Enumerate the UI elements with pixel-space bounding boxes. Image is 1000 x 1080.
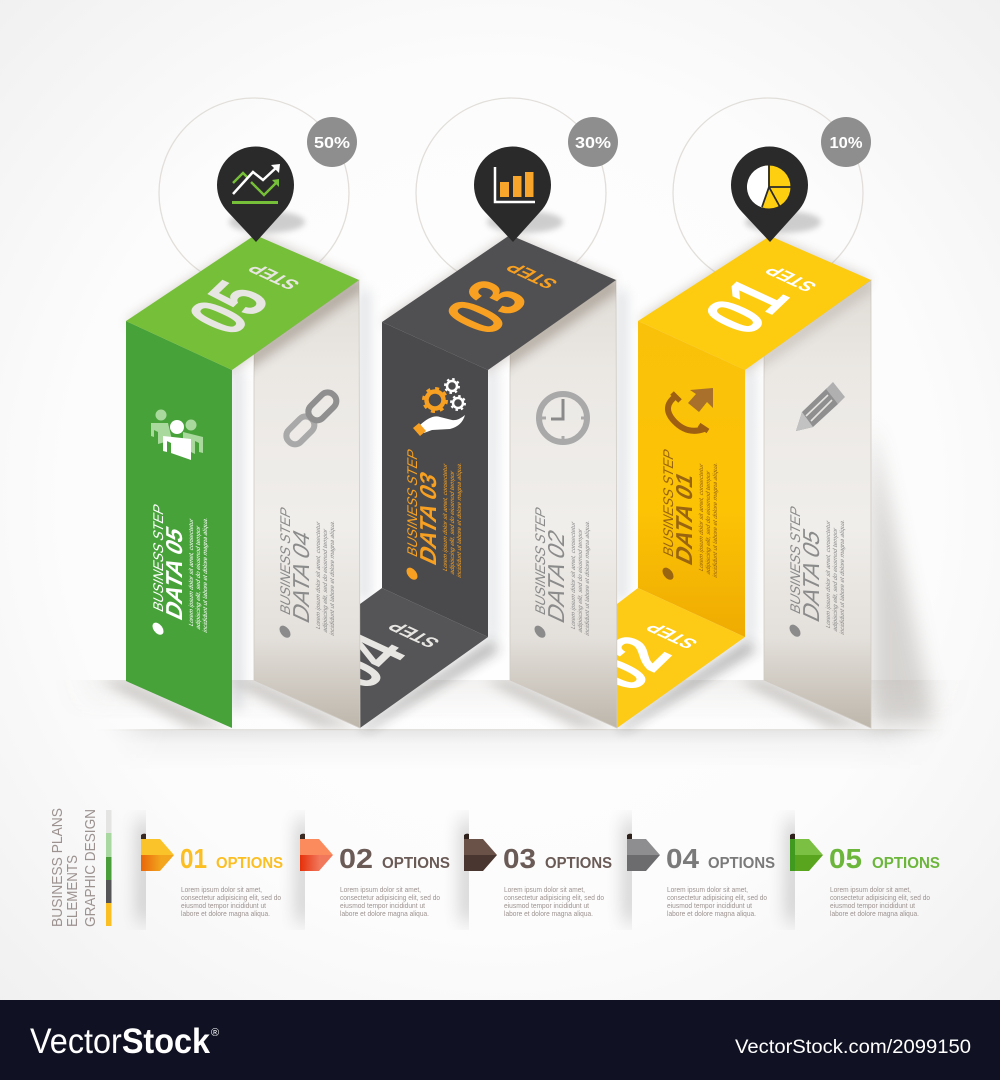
- colour strip: [106, 810, 112, 926]
- panel: green front data 05: [126, 321, 232, 728]
- text: data 03: [406, 438, 463, 603]
- option 04: 04: [666, 843, 699, 874]
- text: data 05 green: adipiscing elit, sed do eiusmod tempor: [195, 525, 202, 631]
- option 02: labore et dolore magna aliqua.: [340, 909, 429, 918]
- text: data 04: Lorem ipsum dolor sit amet, consectetur: [315, 521, 322, 631]
- icon: clock: [539, 394, 587, 442]
- option 01: Lorem ipsum dolor sit amet,: [181, 885, 262, 894]
- option 03: 03: [503, 843, 536, 874]
- text: data 01: [662, 438, 719, 603]
- panel: paper data 04: [254, 279, 360, 728]
- text: data 04: [279, 496, 336, 661]
- option 05: consectetur adipisicing elit, sed do: [830, 893, 930, 902]
- text: data 05 paper: [789, 495, 846, 660]
- label: step 04: STEP: [383, 618, 445, 651]
- text: data 01: DATA 01: [672, 468, 698, 569]
- ring: 10 percent: [673, 98, 863, 288]
- text: data 03: DATA 03: [416, 468, 442, 569]
- option 01: 01: [180, 843, 207, 874]
- badge: 50 percent: 50%: [314, 135, 350, 152]
- arrow tab 03: [464, 834, 497, 871]
- vertical heading: [49, 808, 99, 927]
- icon: pencil: [796, 382, 845, 431]
- option 04: [627, 820, 775, 922]
- option 01: [141, 820, 283, 922]
- label: step 02: STEP: [641, 619, 703, 652]
- option 04: consectetur adipisicing elit, sed do: [667, 893, 767, 902]
- ring: 30 percent: [416, 98, 606, 288]
- footer bar: [0, 1000, 1000, 1080]
- icon: chain link: [283, 389, 340, 448]
- footer logo: VectorStock: [30, 1022, 210, 1061]
- icon: people: [151, 410, 203, 460]
- option 03: [464, 820, 612, 922]
- option 02: 02: [339, 843, 373, 874]
- number 01: 01: [686, 268, 807, 345]
- badge: 10 percent: [821, 117, 871, 167]
- ring: 50 percent: [159, 98, 349, 288]
- text: data 05 green: BUSINESS STEP: [152, 502, 167, 615]
- option 02: [300, 820, 450, 922]
- label: step 03: STEP: [501, 259, 563, 292]
- badge: 30 percent: [568, 117, 618, 167]
- option 02: Lorem ipsum dolor sit amet,: [340, 885, 421, 894]
- vertical heading: ELEMENTS: [64, 855, 81, 927]
- number 04: 04: [305, 623, 424, 699]
- option 01: consectetur adipisicing elit, sed do: [181, 893, 281, 902]
- number 05: 05: [170, 271, 288, 345]
- face: step 01: [638, 236, 871, 370]
- text: data 05 paper: DATA 05: [799, 525, 825, 626]
- option 04: OPTIONS: [708, 855, 775, 872]
- arrow tab 02: [300, 834, 333, 871]
- floor shelf: [90, 235, 935, 770]
- option 05: [790, 820, 940, 922]
- arrow tab 04: [627, 834, 660, 871]
- option 05: 05: [829, 843, 862, 874]
- option 02: eiusmod tempor incididunt ut: [340, 901, 426, 910]
- face: step 03: [382, 235, 616, 370]
- icon: phone and arrow: [668, 388, 713, 431]
- badge: 30 percent: 30%: [575, 135, 611, 152]
- text: data 05 green: DATA 05: [162, 523, 188, 624]
- text: data 01: incididunt ut labore et dolore magna aliqua.: [712, 461, 719, 579]
- text: data 03: Lorem ipsum dolor sit amet, consectetur: [442, 463, 449, 573]
- option 04: labore et dolore magna aliqua.: [667, 909, 756, 918]
- option 05: OPTIONS: [872, 855, 940, 872]
- text: data 03: adipiscing elit, sed do eiusmod tempor: [449, 470, 456, 576]
- text: data 03: incididunt ut labore et dolore magna aliqua.: [456, 461, 463, 579]
- option 03: eiusmod tempor incididunt ut: [504, 901, 590, 910]
- option 02: consectetur adipisicing elit, sed do: [340, 893, 440, 902]
- text: data 04: adipiscing elit, sed do eiusmod tempor: [322, 528, 329, 634]
- option 05: labore et dolore magna aliqua.: [830, 909, 919, 918]
- text: data 05 green: [152, 493, 209, 658]
- text: data 05 green: incididunt ut labore et dolore magna aliqua.: [202, 516, 209, 634]
- pin: pie chart: [731, 147, 821, 242]
- text: data 04: incididunt ut labore et dolore magna aliqua.: [329, 519, 336, 637]
- text: data 03: BUSINESS STEP: [406, 447, 421, 560]
- vertical heading: BUSINESS PLANS: [49, 808, 66, 927]
- option 04: eiusmod tempor incididunt ut: [667, 901, 753, 910]
- option 03: Lorem ipsum dolor sit amet,: [504, 885, 585, 894]
- face: step 02: [617, 588, 745, 728]
- option 03: labore et dolore magna aliqua.: [504, 909, 593, 918]
- option 01: OPTIONS: [216, 855, 283, 872]
- option 01: eiusmod tempor incididunt ut: [181, 901, 267, 910]
- text: data 05 paper: incididunt ut labore et dolore magna aliqua.: [839, 518, 846, 636]
- number 03: 03: [427, 269, 546, 345]
- text: data 04: DATA 04: [289, 526, 315, 627]
- text: data 01: adipiscing elit, sed do eiusmod tempor: [705, 470, 712, 576]
- number 02: 02: [570, 625, 689, 701]
- text: data 05 green: Lorem ipsum dolor sit amet, consectetur: [188, 518, 195, 628]
- option 01: labore et dolore magna aliqua.: [181, 909, 270, 918]
- text: data 05 paper: adipiscing elit, sed do eiusmod tempor: [832, 527, 839, 633]
- option 05: eiusmod tempor incididunt ut: [830, 901, 916, 910]
- registered mark: ®: [211, 1027, 219, 1039]
- label: step 05: STEP: [243, 260, 305, 293]
- badge: 50 percent: [307, 117, 357, 167]
- text: data 02: incididunt ut labore et dolore magna aliqua.: [584, 519, 591, 637]
- text: data 04: BUSINESS STEP: [279, 505, 294, 618]
- panel: dark front data 03: [382, 322, 488, 637]
- text: data 02: BUSINESS STEP: [534, 505, 549, 618]
- pin: growth chart: [217, 147, 305, 242]
- icon: gears and hand: [413, 379, 465, 436]
- text: data 01: BUSINESS STEP: [662, 447, 677, 560]
- text: data 01: Lorem ipsum dolor sit amet, consectetur: [698, 463, 705, 573]
- text: data 05 paper: Lorem ipsum dolor sit amet, consectetur: [825, 520, 832, 630]
- panel: yellow front data 01: [638, 321, 745, 637]
- option 03: consectetur adipisicing elit, sed do: [504, 893, 604, 902]
- face: step 04: [360, 588, 488, 728]
- option 04: Lorem ipsum dolor sit amet,: [667, 885, 748, 894]
- text: data 02: Lorem ipsum dolor sit amet, consectetur: [570, 521, 577, 631]
- pin: bar chart: [474, 147, 563, 242]
- vertical heading: GRAPHIC DESIGN: [82, 809, 99, 927]
- text: data 02: adipiscing elit, sed do eiusmod tempor: [577, 528, 584, 634]
- panel: paper data 05: [764, 279, 872, 728]
- text: data 02: [534, 496, 591, 661]
- option 05: Lorem ipsum dolor sit amet,: [830, 885, 911, 894]
- text: data 02: DATA 02: [544, 526, 570, 627]
- arrow tab 05: [790, 834, 823, 871]
- arrow tab 01: [141, 834, 174, 871]
- text: data 05 paper: BUSINESS STEP: [789, 504, 804, 617]
- option 03: OPTIONS: [545, 855, 612, 872]
- face: step 05: [126, 235, 359, 370]
- panel: paper data 02: [510, 279, 618, 728]
- footer url: VectorStock.com/2099150: [735, 1037, 971, 1058]
- badge: 10 percent: 10%: [830, 135, 862, 152]
- option 02: OPTIONS: [382, 855, 450, 872]
- label: step 01: STEP: [760, 262, 822, 295]
